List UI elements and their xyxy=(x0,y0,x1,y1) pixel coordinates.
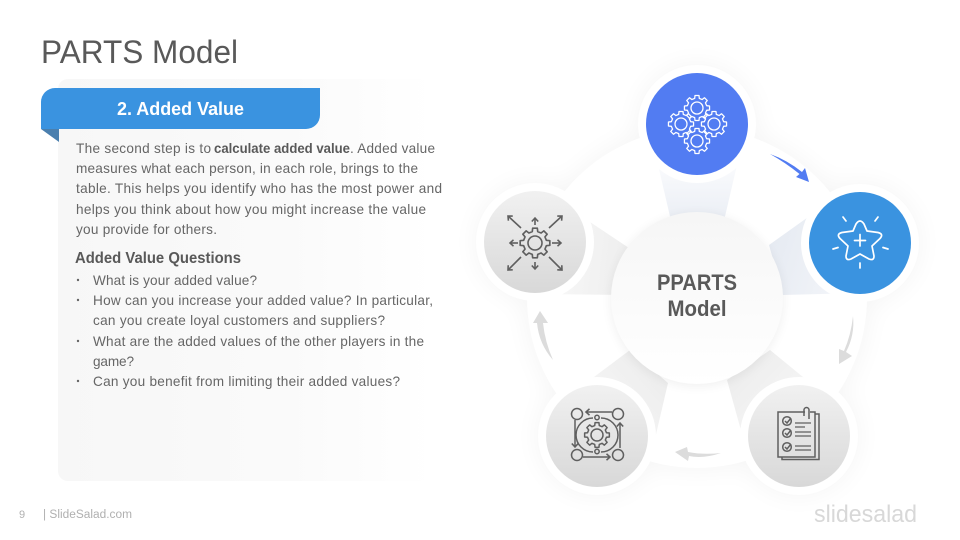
center circle: PPARTS xyxy=(657,270,737,295)
wedge: bottom right xyxy=(727,350,825,452)
arrow: gray, bottom right to bottom left xyxy=(675,447,721,461)
arrow: gray, right to bottom right xyxy=(839,316,853,364)
cycle diagram xyxy=(475,64,920,496)
node 1: top, gears xyxy=(638,65,756,183)
bullet list: questions xyxy=(77,273,433,389)
outer ring disc xyxy=(527,128,867,468)
center circle xyxy=(610,212,784,387)
panel: added value text background xyxy=(58,79,433,481)
bullet list: questions: How can you increase your added value? In particular, xyxy=(93,293,433,308)
footer: page number and site: | SlideSalad.com xyxy=(43,509,132,521)
wedge: right xyxy=(769,205,860,295)
icon: checklist xyxy=(778,408,819,460)
bullet list: questions: What is your added value? xyxy=(93,273,257,288)
banner: 2. Added Value xyxy=(41,88,320,142)
node 2: right, star xyxy=(801,184,919,302)
banner: 2. Added Value: 2. Added Value xyxy=(117,98,244,119)
bullet list: questions: game? xyxy=(93,354,134,369)
text block: step description: you provide for others. xyxy=(76,222,217,237)
node 5: left, gear arrows xyxy=(476,183,594,301)
bullet list: questions: can you create loyal customers and suppliers? xyxy=(93,313,385,328)
logo: slidesalad: slidesalad xyxy=(814,501,917,528)
wedge: top xyxy=(658,165,737,225)
diagram soft shadow xyxy=(475,64,920,496)
icon: star with plus xyxy=(833,217,888,268)
icon: gear with radiating arrows xyxy=(508,216,562,270)
node 3: bottom right, checklist xyxy=(740,377,858,495)
text block: step description: . Added value xyxy=(350,141,435,156)
arrow: blue, top to right xyxy=(770,154,809,182)
wedge: left xyxy=(540,212,635,295)
bullet list: questions: What are the added values of the other players in the xyxy=(93,334,424,349)
node 4: bottom left, process gear xyxy=(538,377,656,495)
wedge: bottom left xyxy=(570,350,668,460)
text block: step description xyxy=(76,141,442,237)
arrow: gray, bottom left to left xyxy=(533,311,553,360)
text block: step description: helps you think about how you might increase the value xyxy=(76,202,426,217)
text block: step description: calculate added value xyxy=(214,141,350,156)
footer: page number and site: 9 xyxy=(19,509,25,521)
bullet list: questions: Can you benefit from limiting their added values? xyxy=(93,374,400,389)
icon: gear process loop xyxy=(572,408,624,460)
center circle: Model xyxy=(668,296,726,321)
title: PARTS Model xyxy=(41,34,238,70)
heading: Added Value Questions: Added Value Questions xyxy=(75,250,241,267)
text block: step description: table. This helps you identify who has the most power and xyxy=(76,181,442,196)
text block: step description: measures what each person, in each role, brings to the xyxy=(76,161,418,176)
text block: step description: The second step is to xyxy=(76,141,211,156)
icon: four gears xyxy=(668,95,727,154)
